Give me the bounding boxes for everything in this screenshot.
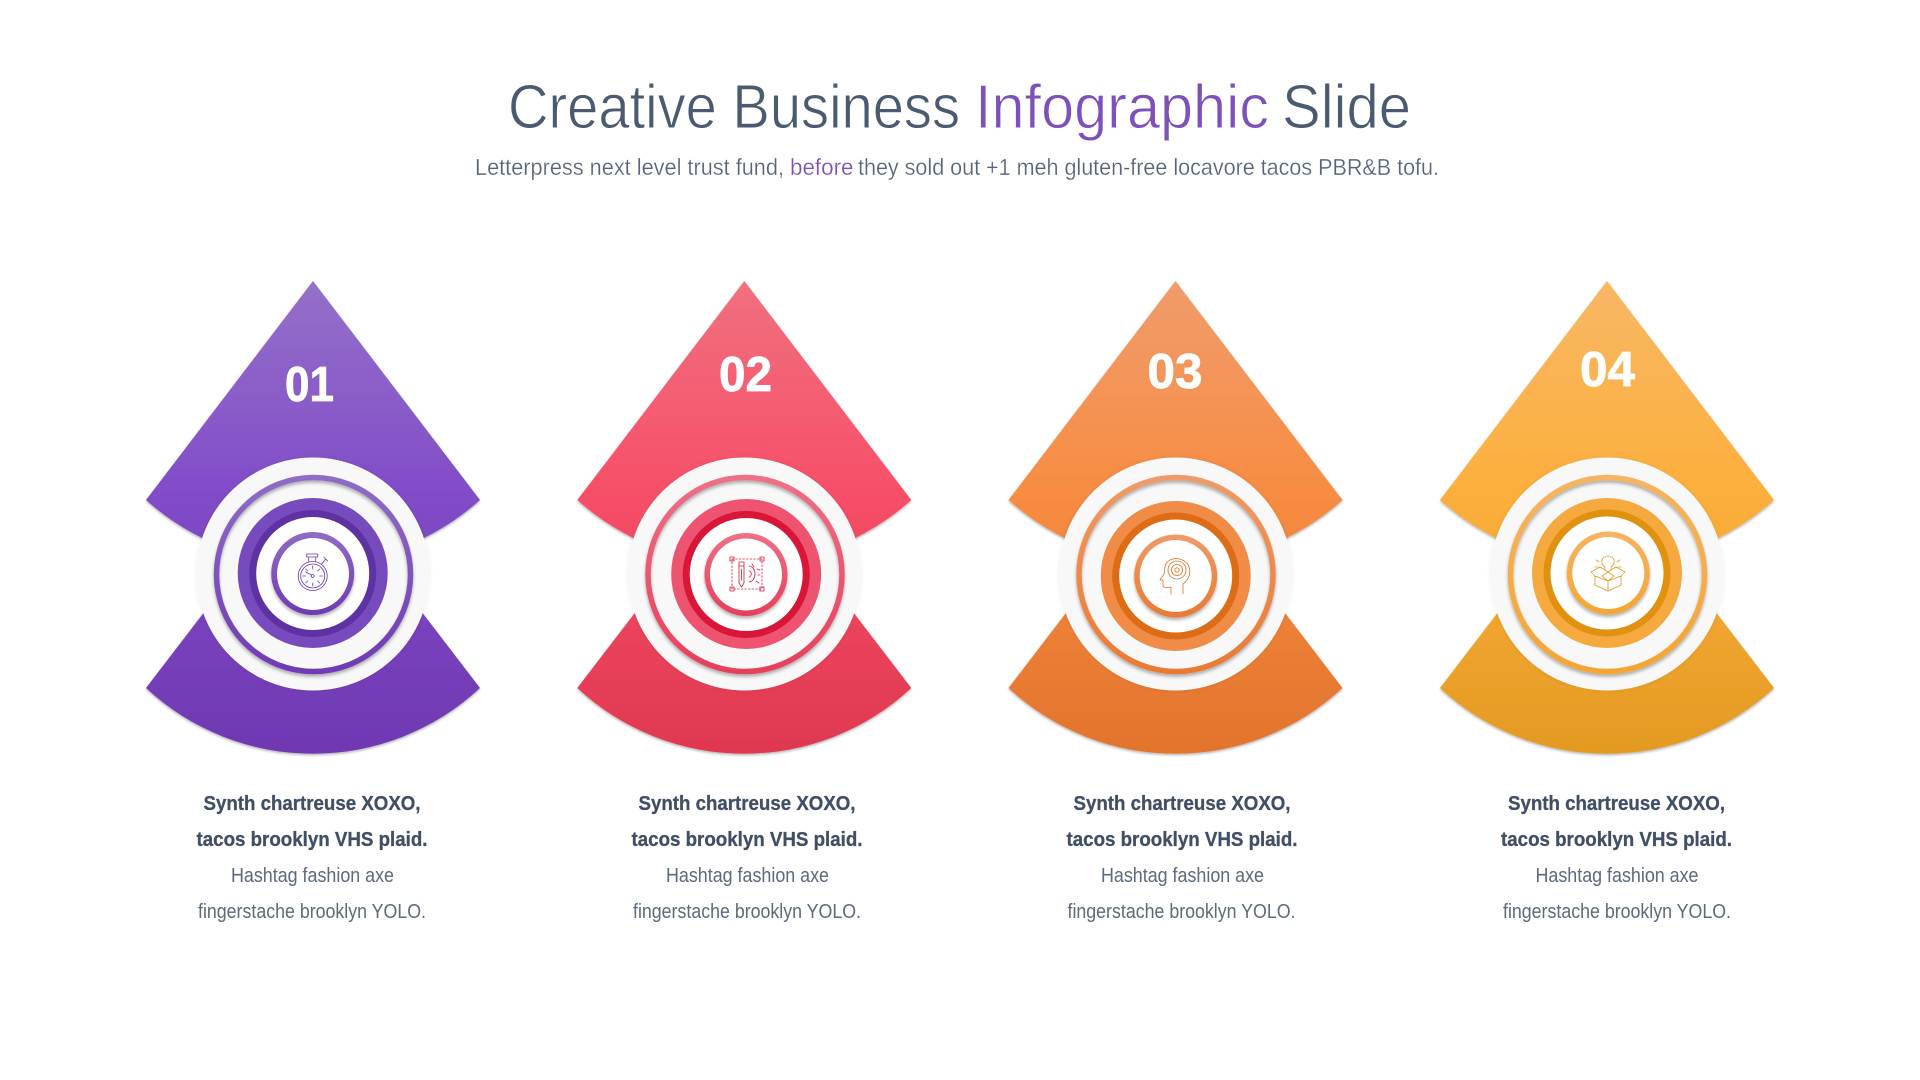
top arrow shape (577, 281, 911, 564)
bottom arc shape (1008, 470, 1342, 754)
outer ring (216, 478, 410, 672)
text block 04: Synth chartreuse XOXO, (1508, 793, 1725, 815)
subtitle (475, 154, 1439, 180)
text block 02: tacos brooklyn VHS plaid. (632, 829, 862, 851)
top arrow shape (1008, 281, 1342, 564)
icon: stopwatch (298, 554, 328, 590)
text block 01 (196, 793, 428, 923)
text block 04: fingerstache brooklyn YOLO. (1503, 901, 1731, 923)
top arrow shape (1440, 281, 1774, 564)
bottom arc shape (577, 470, 911, 754)
inner ring (1134, 534, 1217, 618)
number 02: 02 (719, 348, 772, 402)
text block 03: Synth chartreuse XOXO, (1074, 793, 1290, 815)
middle ring (1101, 501, 1251, 651)
middle ring (1532, 498, 1682, 648)
panel: step 02 (577, 281, 911, 923)
text block 01: Hashtag fashion axe (231, 865, 394, 887)
outer ring (648, 478, 842, 672)
top arrow shape (146, 281, 480, 564)
text block 03: Hashtag fashion axe (1101, 865, 1264, 887)
text block 02: Hashtag fashion axe (666, 865, 829, 887)
text block 02: Synth chartreuse XOXO, (638, 793, 856, 815)
text block 03: tacos brooklyn VHS plaid. (1066, 829, 1298, 851)
white disc (1490, 458, 1724, 690)
bottom arc shape (146, 470, 480, 754)
icon: pencil and gear (730, 557, 764, 591)
title: Creative Business (508, 73, 960, 142)
number 03: 03 (1148, 345, 1202, 399)
inner ring (704, 533, 788, 616)
panel: step 03 (1008, 281, 1342, 923)
outer ring (1510, 478, 1704, 672)
white disc (628, 458, 861, 690)
number 04: 04 (1580, 343, 1635, 397)
inner ring (271, 532, 354, 615)
bottom arc shape (1440, 470, 1774, 754)
text block 04: tacos brooklyn VHS plaid. (1501, 829, 1732, 851)
title: Infographic (975, 73, 1269, 142)
panel: step 04 (1440, 281, 1774, 923)
text block 04: Hashtag fashion axe (1536, 865, 1698, 887)
text block 04 (1501, 793, 1732, 923)
text block 03 (1066, 793, 1298, 923)
middle ring (238, 498, 388, 648)
title: Slide (1282, 73, 1411, 142)
icon: box with bulb (1591, 556, 1625, 591)
icon: head with maze (1160, 559, 1190, 594)
subtitle: before (790, 154, 854, 180)
text block 02 (632, 793, 862, 923)
text block 01: fingerstache brooklyn YOLO. (198, 901, 426, 923)
text block 01: tacos brooklyn VHS plaid. (196, 829, 428, 851)
subtitle: they sold out +1 meh gluten-free locavore tacos PBR&B tofu. (858, 154, 1439, 180)
inner ring (1567, 532, 1650, 614)
panel: step 01 (146, 281, 480, 923)
middle ring (671, 499, 821, 649)
subtitle: Letterpress next level trust fund, (475, 154, 784, 180)
text block 03: fingerstache brooklyn YOLO. (1068, 901, 1296, 923)
text block 02: fingerstache brooklyn YOLO. (633, 901, 861, 923)
white disc (196, 458, 430, 690)
white disc (1059, 458, 1292, 690)
outer ring (1079, 478, 1273, 672)
number 01: 01 (285, 358, 334, 412)
title (508, 73, 1411, 142)
text block 01: Synth chartreuse XOXO, (204, 793, 420, 815)
